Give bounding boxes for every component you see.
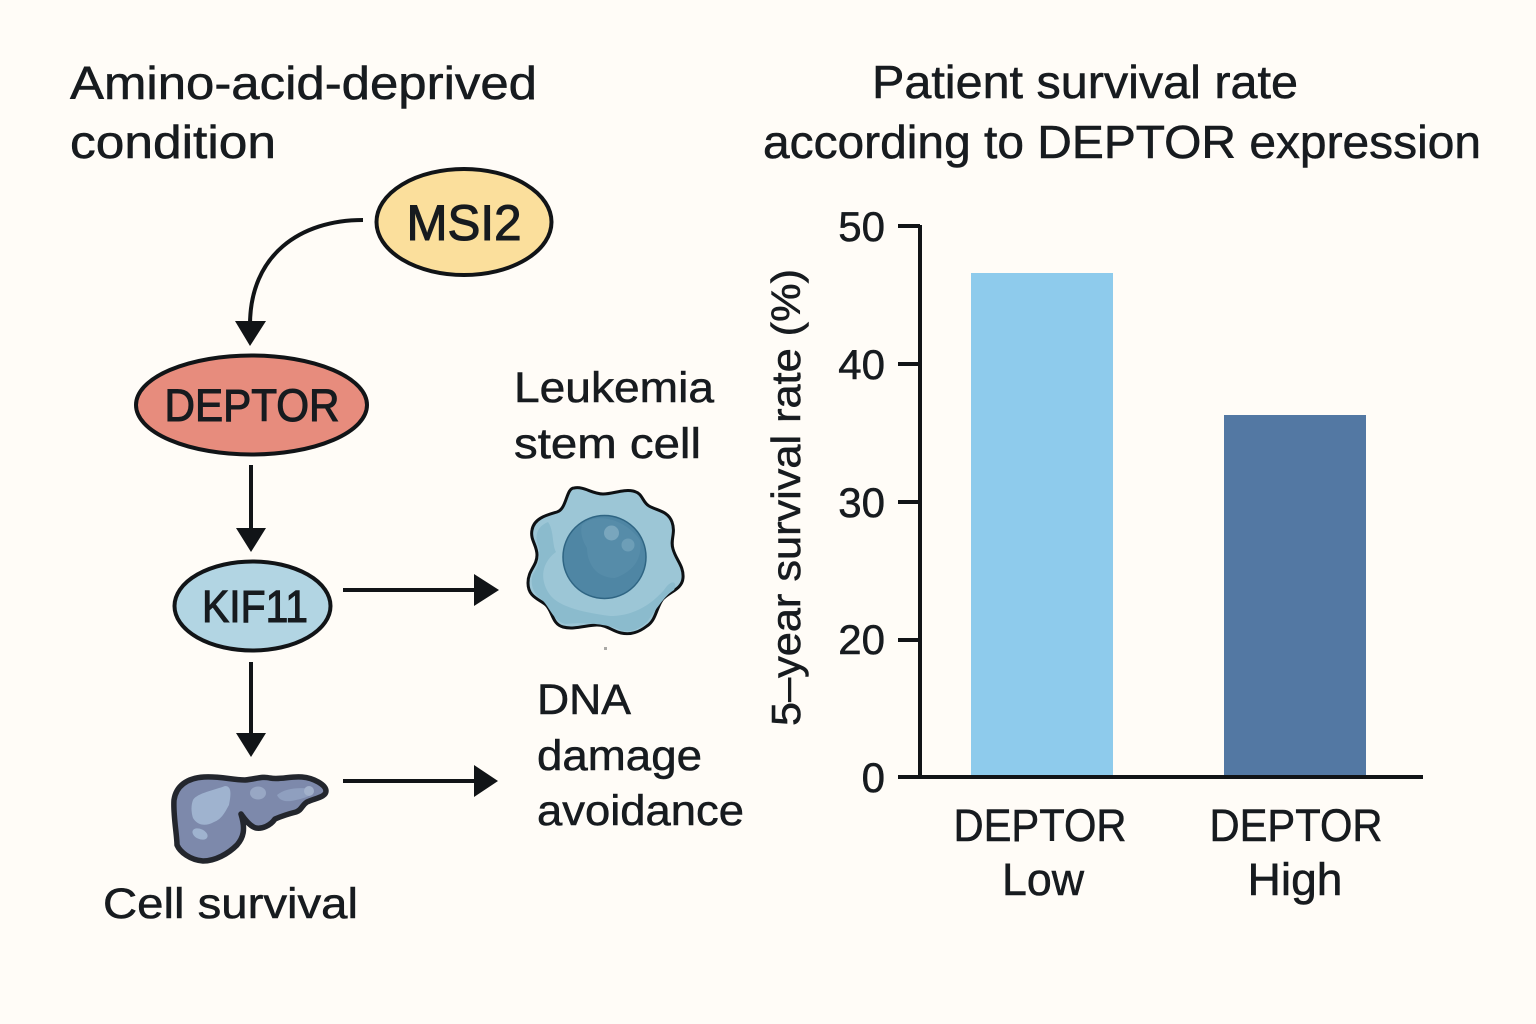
icon: liver (174, 777, 326, 861)
x-axis labels: DEPTOR (1210, 800, 1382, 851)
label: DNA damage avoidance: damage (537, 732, 702, 780)
y-axis tick labels: 20 (838, 616, 885, 663)
pathway node: KIF11 (174, 562, 330, 650)
y-axis tick labels: 0 (862, 754, 885, 801)
heading: amino-acid-deprived condition: condition (70, 116, 276, 168)
arrow: DEPTOR to KIF11 (236, 465, 266, 552)
y-axis title: 5–year survival rate (%) (763, 269, 809, 726)
bar chart: five-year survival by DEPTOR expression (763, 203, 1423, 905)
arrow: KIF11 to cell survival (236, 662, 266, 757)
pathway node: MSI2: MSI2 (406, 195, 522, 251)
pathway node: KIF11: KIF11 (202, 581, 308, 632)
x-axis labels: DEPTOR (954, 800, 1126, 851)
heading: patient survival rate (763, 56, 1481, 168)
label: DNA damage avoidance: DNA (537, 676, 631, 724)
x-axis labels: High (1248, 854, 1342, 905)
small speck below cell (604, 647, 607, 650)
label: leukemia stem cell: stem cell (514, 420, 701, 468)
y-axis tick labels: 30 (838, 479, 885, 526)
heading: patient survival rate: Patient survival rate (872, 56, 1298, 108)
label: leukemia stem cell: Leukemia (514, 364, 714, 412)
x-axis labels (954, 800, 1382, 905)
icon: leukemia stem cell (528, 488, 683, 634)
label: leukemia stem cell (514, 364, 714, 468)
label: DNA damage avoidance: avoidance (537, 787, 744, 835)
label: cell survival: Cell survival (103, 880, 358, 928)
y-axis tick labels (838, 203, 885, 801)
arrow: liver to DNA damage avoidance (343, 765, 498, 797)
heading: patient survival rate: according to DEPTOR expression (763, 116, 1481, 168)
arrow: KIF11 to leukemia stem cell (343, 574, 499, 606)
pathway node: DEPTOR (136, 356, 367, 454)
curved arrow: MSI2 to DEPTOR (235, 220, 363, 346)
x-axis labels: Low (1002, 854, 1084, 905)
y-axis tick labels: 40 (838, 341, 885, 388)
heading: amino-acid-deprived condition (70, 57, 537, 168)
axes and ticks (898, 225, 1423, 777)
pathway node: DEPTOR: DEPTOR (164, 380, 340, 431)
y-axis tick labels: 50 (838, 203, 885, 250)
bar: DEPTOR High (1224, 415, 1366, 776)
bar: DEPTOR Low (971, 273, 1113, 776)
pathway node: MSI2 (376, 169, 552, 275)
heading: amino-acid-deprived condition: Amino-acid-deprived (70, 57, 537, 109)
label: DNA damage avoidance (537, 676, 744, 835)
